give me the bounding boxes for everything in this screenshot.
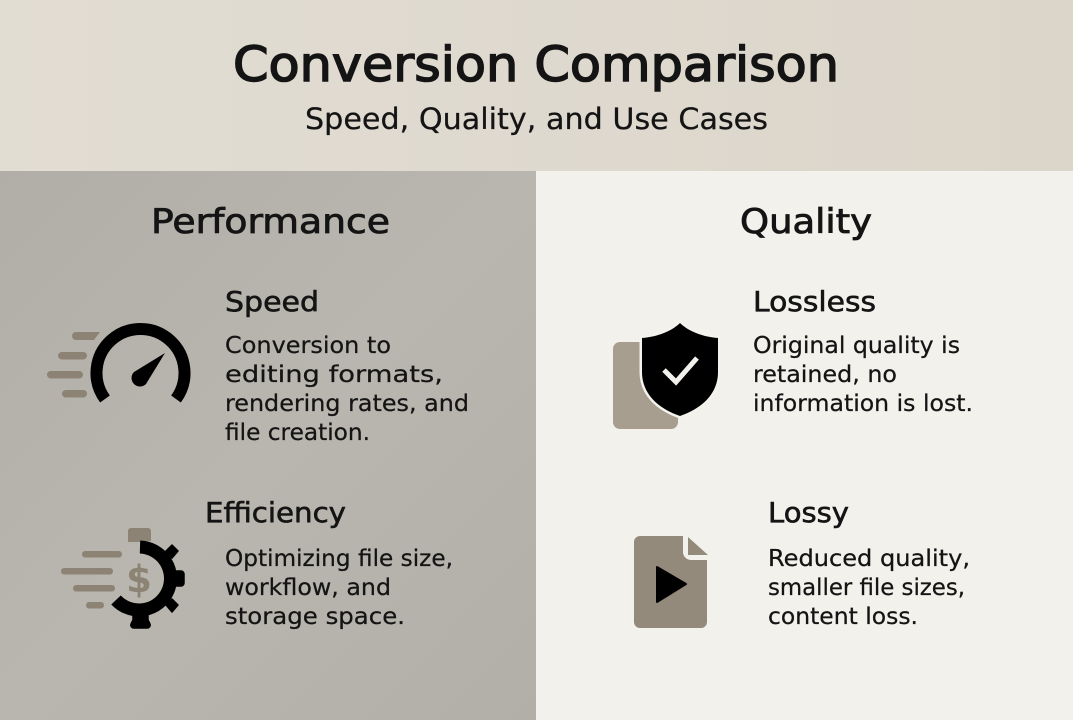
- text block: lossy: [768, 497, 970, 630]
- heading: quality: Quality: [740, 202, 872, 241]
- text block: speed: [225, 286, 469, 446]
- text block: speed: file creation.: [225, 418, 370, 446]
- text block: efficiency: Optimizing file size,: [225, 544, 453, 572]
- panel: quality: [536, 171, 1073, 720]
- header band: [0, 0, 1073, 171]
- text block: speed: Conversion to: [225, 331, 391, 359]
- text block: lossless: [753, 286, 973, 417]
- text block: speed: Speed: [225, 286, 319, 318]
- icon: video file: [634, 536, 708, 628]
- icon: speedometer: [47, 329, 184, 399]
- text block: speed: rendering rates, and: [225, 389, 469, 417]
- text block: lossy: Reduced quality,: [768, 544, 970, 572]
- panel: performance: [0, 171, 536, 720]
- icon: gear with dollar: $: [126, 558, 152, 601]
- text block: lossless: Original quality is: [753, 331, 960, 359]
- text block: efficiency: storage space.: [225, 602, 405, 630]
- text block: efficiency: workflow, and: [225, 573, 391, 601]
- icon: shield with document: [613, 323, 718, 429]
- text block: lossless: Lossless: [753, 286, 876, 318]
- text block: efficiency: [205, 497, 453, 630]
- heading: performance: Performance: [151, 202, 390, 241]
- text block: speed: editing formats,: [225, 360, 443, 388]
- text block: lossless: information is lost.: [753, 389, 973, 417]
- subtitle: Speed, Quality, and Use Cases: [305, 102, 768, 136]
- text block: lossy: smaller file sizes,: [768, 573, 965, 601]
- title: Conversion Comparison: [233, 37, 839, 93]
- text block: lossless: retained, no: [753, 360, 897, 388]
- text block: efficiency: Efficiency: [205, 497, 346, 529]
- icon: gear with dollar: [61, 528, 184, 628]
- text block: lossy: content loss.: [768, 602, 918, 630]
- text block: lossy: Lossy: [768, 497, 849, 529]
